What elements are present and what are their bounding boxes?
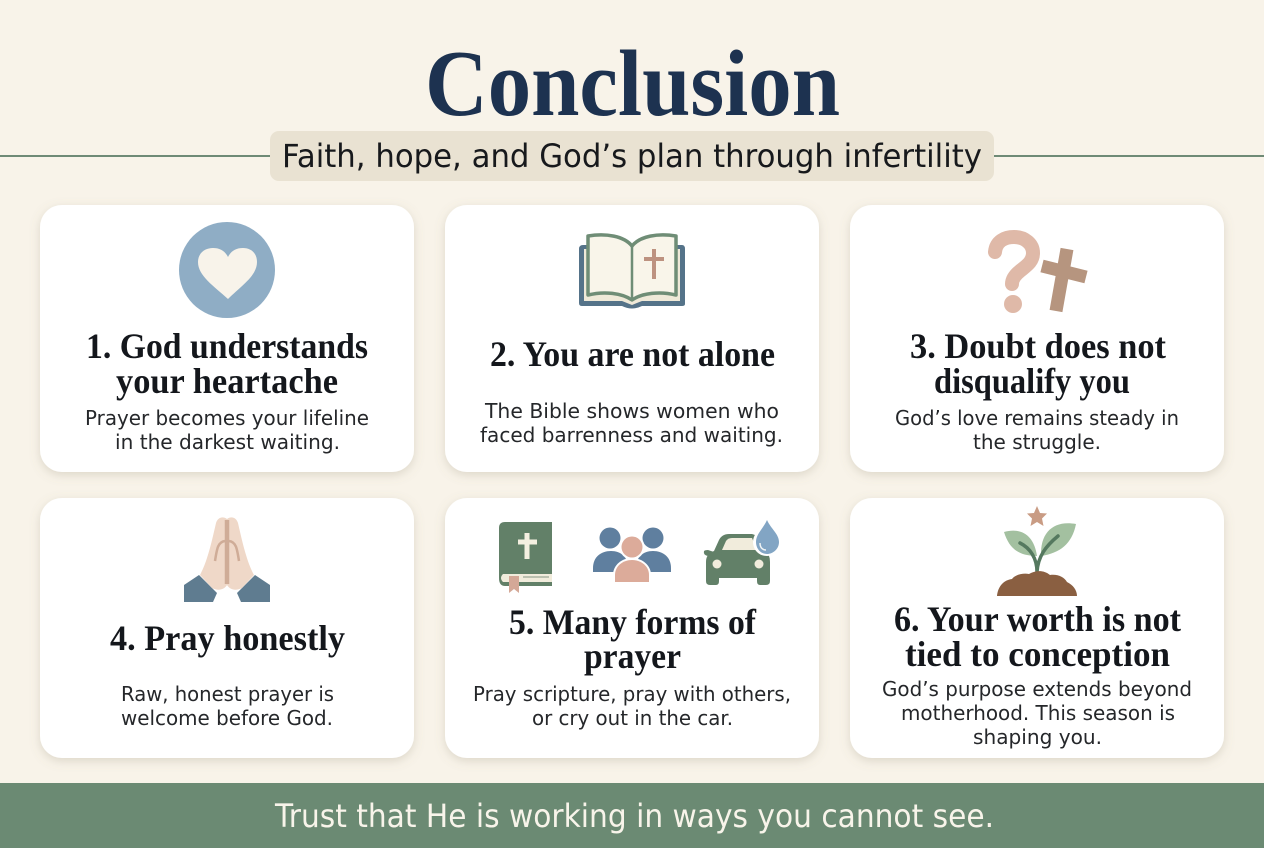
title: Conclusion	[425, 32, 840, 136]
heading 3: 3. Doubt does not	[910, 326, 1166, 366]
text 3: God’s love remains steady in	[895, 406, 1179, 430]
panel: card 1	[40, 205, 414, 472]
text 6: God’s purpose extends beyond	[882, 677, 1192, 701]
text 1	[85, 406, 369, 454]
heading 1: your heartache	[116, 361, 338, 401]
heading 6: 6. Your worth is not	[894, 599, 1181, 639]
text 6: shaping you.	[973, 725, 1102, 749]
heading 2: 2. You are not alone	[490, 334, 775, 374]
heading 5: prayer	[584, 636, 681, 676]
text 5	[473, 682, 791, 730]
text 6	[882, 677, 1192, 749]
icon: heart in circle	[179, 222, 275, 318]
subtitle pill: Faith, hope, and God’s plan through infertility	[282, 137, 982, 175]
heading 3: disqualify you	[934, 361, 1130, 401]
bottom banner	[0, 783, 1264, 848]
text 2	[480, 399, 783, 447]
icon: question mark and cross	[995, 237, 1086, 313]
text 3: the struggle.	[973, 430, 1101, 454]
heading 6	[894, 599, 1181, 674]
heading 1: 1. God understands	[86, 326, 368, 366]
icon: car with tear drop	[704, 517, 781, 585]
icon: seedling with star	[997, 506, 1077, 596]
panel: card 5	[445, 498, 819, 758]
panel: card 6	[850, 498, 1224, 758]
icon: open bible	[579, 235, 685, 308]
text 1: in the darkest waiting.	[115, 430, 340, 454]
panel: card 3	[850, 205, 1224, 472]
heading 5: 5. Many forms of	[509, 602, 757, 642]
text 5: Pray scripture, pray with others,	[473, 682, 791, 706]
text 2: faced barrenness and waiting.	[480, 423, 783, 447]
heading 4: 4. Pray honestly	[110, 618, 345, 658]
text 1: Prayer becomes your lifeline	[85, 406, 369, 430]
text 3	[895, 406, 1179, 454]
icon: praying hands	[184, 517, 270, 602]
heading 3	[910, 326, 1166, 401]
text 6: motherhood. This season is	[901, 701, 1175, 725]
bottom banner: Trust that He is working in ways you cannot see.	[274, 797, 994, 835]
text 4: welcome before God.	[121, 706, 333, 730]
heading 5	[509, 602, 757, 676]
heading 1	[86, 326, 368, 401]
text 2: The Bible shows women who	[484, 399, 779, 423]
icon: closed bible	[499, 522, 552, 593]
text 4: Raw, honest prayer is	[121, 682, 334, 706]
icon: group of people	[593, 528, 671, 584]
panel: card 4	[40, 498, 414, 758]
text 4	[121, 682, 334, 730]
panel: card 2	[445, 205, 819, 472]
text 5: or cry out in the car.	[532, 706, 733, 730]
heading 6: tied to conception	[905, 634, 1170, 674]
